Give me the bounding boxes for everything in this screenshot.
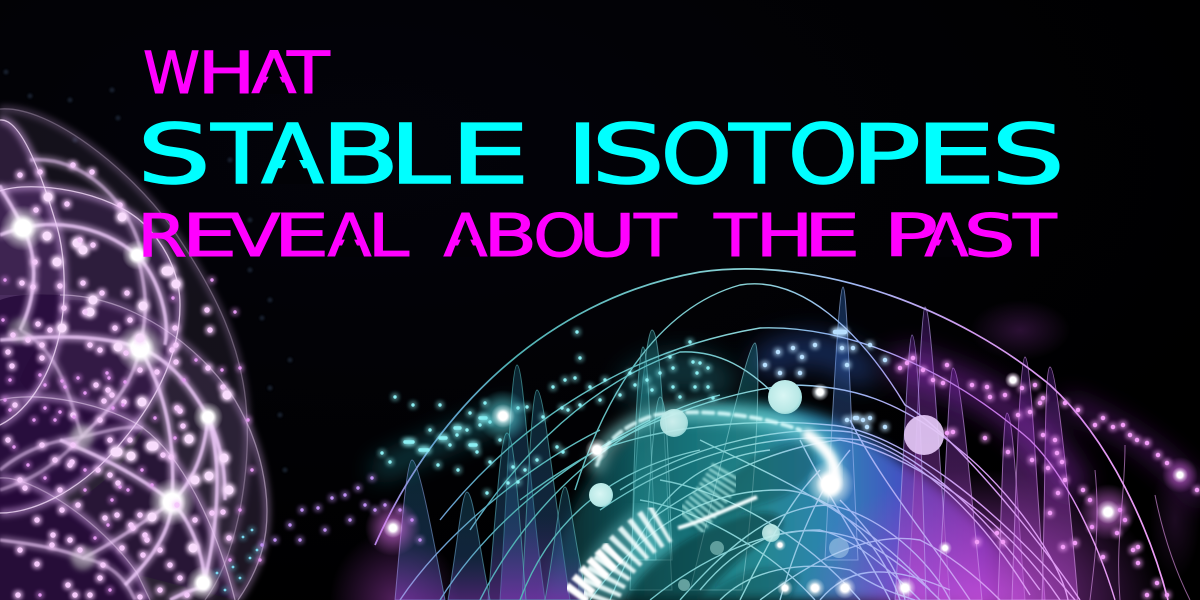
title line: STABLE ISOTOPES: T bbox=[210, 108, 273, 203]
title line: STABLE ISOTOPES: S bbox=[137, 108, 211, 203]
title line: REVEAL ABOUT THE PAST: T bbox=[633, 201, 678, 270]
title line: REVEAL ABOUT THE PAST: E bbox=[181, 201, 238, 270]
glowing bright ring bbox=[597, 412, 835, 490]
title line: WHAT: H bbox=[197, 39, 256, 107]
title line: STABLE ISOTOPES: O bbox=[661, 108, 732, 203]
bubble rim glow bbox=[0, 109, 267, 600]
title line: REVEAL ABOUT THE PAST: E bbox=[273, 201, 330, 270]
title line: STABLE ISOTOPES: S bbox=[591, 108, 665, 203]
title line: REVEAL ABOUT THE PAST: U bbox=[578, 201, 636, 270]
masks hiding the A crossbars bbox=[260, 70, 960, 257]
title line: REVEAL ABOUT THE PAST: L bbox=[368, 201, 409, 270]
arcing lines of the sphere bbox=[375, 269, 1168, 600]
title line: REVEAL ABOUT THE PAST: P bbox=[883, 201, 938, 270]
title line: REVEAL ABOUT THE PAST: E bbox=[803, 201, 861, 270]
title line: REVEAL ABOUT THE PAST: A bbox=[328, 201, 372, 270]
stars in the sphere bbox=[365, 372, 1198, 599]
white striped fan bbox=[575, 470, 757, 600]
title line: REVEAL ABOUT THE PAST: B bbox=[483, 201, 537, 270]
title line: REVEAL ABOUT THE PAST: A bbox=[924, 201, 968, 270]
title line: REVEAL ABOUT THE PAST: A bbox=[444, 201, 488, 270]
glassy orbs bbox=[589, 380, 944, 591]
title line: STABLE ISOTOPES: L bbox=[389, 108, 451, 203]
title line: WHAT: T bbox=[286, 39, 330, 107]
particle haze bands bbox=[380, 350, 1200, 495]
particles: violet band at left bbox=[217, 478, 420, 590]
particles: purple cluster bbox=[900, 358, 1197, 595]
title line: REVEAL ABOUT THE PAST: V bbox=[229, 201, 281, 270]
title line: REVEAL ABOUT THE PAST: H bbox=[755, 201, 814, 270]
dark purple lens areas bbox=[0, 294, 235, 600]
title line: REVEAL ABOUT THE PAST: T bbox=[713, 201, 758, 270]
title line: REVEAL ABOUT THE PAST: T bbox=[1012, 201, 1058, 270]
faint background specks bbox=[6, 72, 290, 470]
sparkling dots bbox=[3, 165, 260, 597]
title line: STABLE ISOTOPES: B bbox=[321, 108, 400, 203]
title line: STABLE ISOTOPES: O bbox=[788, 108, 858, 203]
title line: REVEAL ABOUT THE PAST: S bbox=[964, 201, 1016, 270]
graphic: overlapping purple bubbles at left bbox=[0, 109, 267, 600]
particles: blue cluster bbox=[765, 332, 885, 427]
haze and core of the particle sphere bbox=[330, 300, 1200, 600]
title line: REVEAL ABOUT THE PAST: R bbox=[137, 201, 187, 270]
title line: REVEAL ABOUT THE PAST: O bbox=[533, 201, 586, 270]
particles: teal cluster bbox=[382, 332, 713, 493]
intersection stars bbox=[0, 205, 223, 600]
title line: STABLE ISOTOPES: A bbox=[261, 108, 324, 203]
title line: STABLE ISOTOPES: S bbox=[991, 108, 1065, 203]
title line: WHAT: W bbox=[143, 39, 200, 107]
spikes rising from the base bbox=[395, 287, 1190, 600]
title line: STABLE ISOTOPES: I bbox=[566, 108, 599, 203]
title bbox=[137, 39, 1065, 270]
title line: STABLE ISOTOPES: T bbox=[728, 108, 791, 203]
title line: STABLE ISOTOPES: E bbox=[914, 108, 996, 203]
title line: STABLE ISOTOPES: E bbox=[450, 108, 530, 203]
inner glowing web bbox=[0, 160, 225, 600]
bubble rims bbox=[0, 109, 267, 600]
title line: WHAT: A bbox=[252, 39, 297, 107]
title line: STABLE ISOTOPES: P bbox=[850, 108, 921, 203]
dark inner lenses of the sphere bbox=[625, 440, 815, 600]
bubble fills bbox=[0, 109, 267, 600]
